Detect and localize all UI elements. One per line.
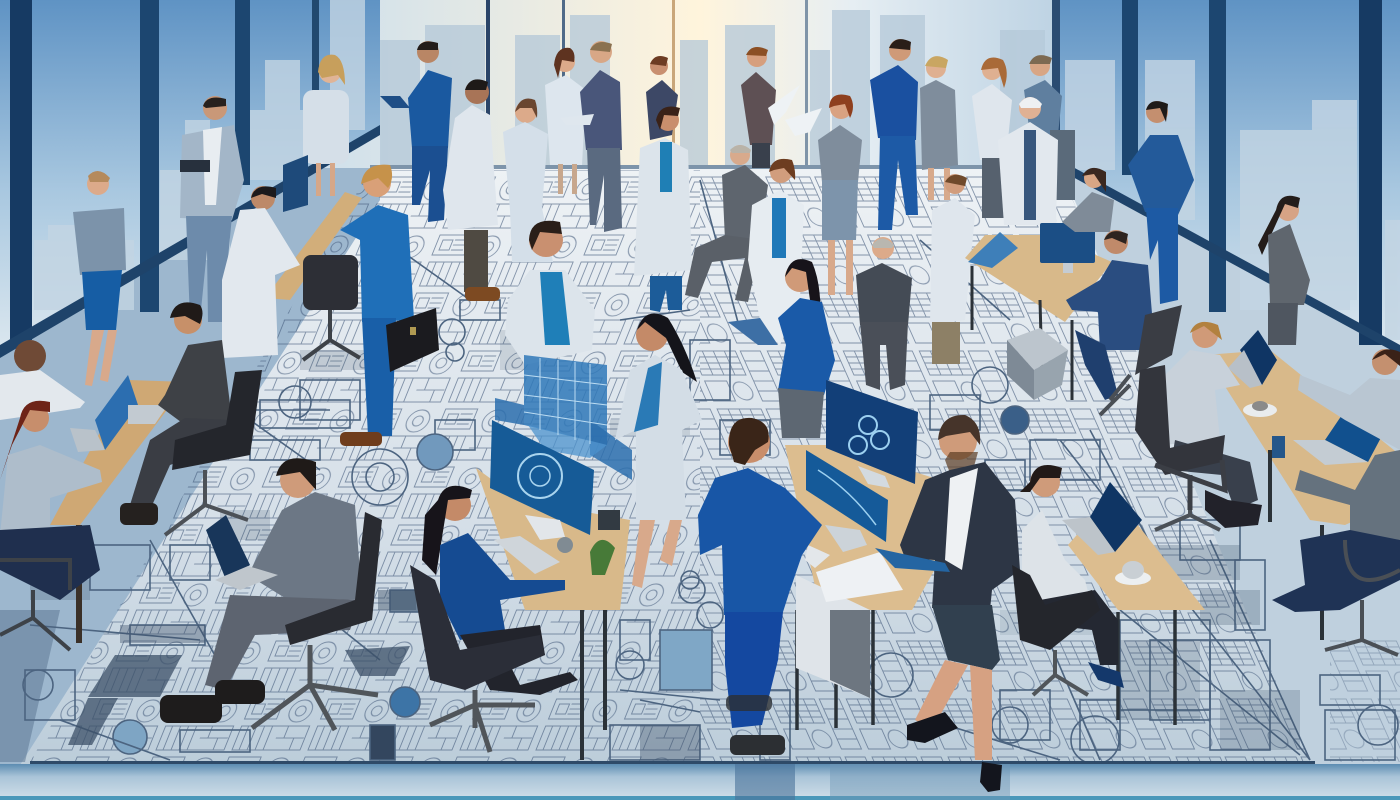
person: doctor at desk in white coat <box>222 186 300 358</box>
icon: second laptop on left desk <box>128 405 168 424</box>
icon: office chair by back-left desk <box>303 255 360 360</box>
person: woman doctor at right desk <box>930 174 975 364</box>
icon: filing cabinet <box>1007 328 1068 400</box>
person: woman in grey jacket and skirt <box>818 94 862 295</box>
person: woman seated with ponytail <box>1012 465 1124 695</box>
icon: his office chair <box>165 370 262 535</box>
icon: papers on desk <box>816 552 903 602</box>
person: man in dark grey suit <box>560 41 622 232</box>
icon: leather briefcase <box>386 308 439 372</box>
icon: her office chair <box>1135 365 1225 530</box>
icon: chair at left edge <box>0 560 70 650</box>
person: man in blue suit seen from behind <box>698 418 822 755</box>
person: seated older man in grey suit <box>685 145 768 302</box>
panel: bottom floor strip <box>0 761 1400 800</box>
icon: his office chair <box>252 512 382 730</box>
panel: left desk <box>50 375 188 643</box>
person: man at far right edge <box>1298 349 1400 450</box>
person: man in grey suit with tablet <box>180 96 244 322</box>
icon: her office chair <box>410 565 545 752</box>
person: blonde woman in white coat <box>303 55 349 196</box>
icon: coffee cup on right front desk <box>1115 561 1151 585</box>
person: seated woman in blue blazer <box>410 486 578 752</box>
icon: laptop on far right desk <box>1228 330 1277 388</box>
person: woman with red hair at left desk <box>0 401 102 650</box>
person: seated man in dark suit with glasses <box>856 237 912 390</box>
person: woman doctor with long black hair <box>615 314 702 588</box>
icon: centre monitor with medical scan <box>490 420 594 540</box>
person: man in blue suit at right <box>1128 101 1194 304</box>
person: woman in white shirt at far-right desk <box>1135 322 1258 530</box>
person: man in grey suit with laptop <box>160 458 382 730</box>
person: woman in white talking <box>545 48 586 194</box>
icon: her office chair <box>1012 565 1100 695</box>
person: man in bright blue suit <box>870 39 918 230</box>
panel: left back desk <box>265 192 362 300</box>
panel: right window wall <box>1052 0 1400 355</box>
panel: centre window wall and skyline <box>320 0 1080 169</box>
panel: far right desk <box>1205 330 1400 640</box>
person: man in blue suit with clipboard <box>380 41 452 222</box>
person: woman with crossed arms by the left window <box>73 171 126 386</box>
person: man with striped shirt <box>1024 55 1075 200</box>
person: woman with blonde bun in grey dress <box>920 56 958 200</box>
person: woman in white blouse <box>972 58 1012 218</box>
person: elderly doctor in white coat <box>998 97 1058 225</box>
icon: back-left monitor <box>283 155 308 212</box>
blueprint drawings on the floor <box>23 180 1398 764</box>
person: doctor in white coat <box>443 79 500 301</box>
person: man at left edge in white shirt <box>0 340 85 420</box>
icon: chair behind man in navy suit <box>1100 305 1182 415</box>
icon: his laptop <box>206 515 278 590</box>
person: blond man in blue suit with briefcase <box>340 165 439 446</box>
icon: his chair <box>1325 540 1400 655</box>
person: man at back with papers <box>646 56 678 140</box>
icon: smaller monitor with chart <box>805 450 888 568</box>
panel: left window wall <box>0 0 380 358</box>
person: woman in blue jacket and grey skirt <box>728 259 835 438</box>
person: woman doctor in pale dress <box>503 98 553 262</box>
person: shoes of seated man by far-right desk <box>1205 490 1262 528</box>
panel: right back desk with monitor <box>965 223 1112 400</box>
panel: centre desk <box>476 468 630 760</box>
icon: laptop on left desk <box>70 375 138 452</box>
icon: keyboard and plant on centre desk <box>494 510 620 575</box>
icon: rolling chair right of centre <box>1155 460 1225 510</box>
icon: coffee cup and glass <box>1243 401 1285 458</box>
person: doctor with blue scrubs in centre <box>505 221 595 365</box>
person: woman doctor in coat with blue scrubs <box>748 159 804 345</box>
chart: holographic building blueprint <box>495 355 632 480</box>
panel: right front desk <box>1062 482 1205 725</box>
icon: laptop on right front desk <box>1062 482 1142 555</box>
person: man in navy suit at right desk <box>1066 230 1155 400</box>
icon: computer tower under desk <box>796 575 870 698</box>
icon: large monitor with network graphic <box>826 380 918 488</box>
person: man in grey sweater at far right <box>1272 450 1400 655</box>
person: seated man in dark suit with curly hair <box>120 302 262 535</box>
back row of standing people <box>73 39 1310 386</box>
person: woman in grey suit at right window <box>1258 196 1310 345</box>
icon: second laptop on far right desk <box>1293 403 1385 465</box>
person: woman doctor with stethoscope <box>634 106 692 312</box>
person: woman in dark suit reading a blue folder <box>875 415 1020 792</box>
panel: floor <box>0 130 1400 765</box>
panel: right-centre desk <box>785 445 940 730</box>
person: man in brown suit with documents <box>741 47 822 168</box>
person: woman at back of right desk <box>1062 168 1114 232</box>
